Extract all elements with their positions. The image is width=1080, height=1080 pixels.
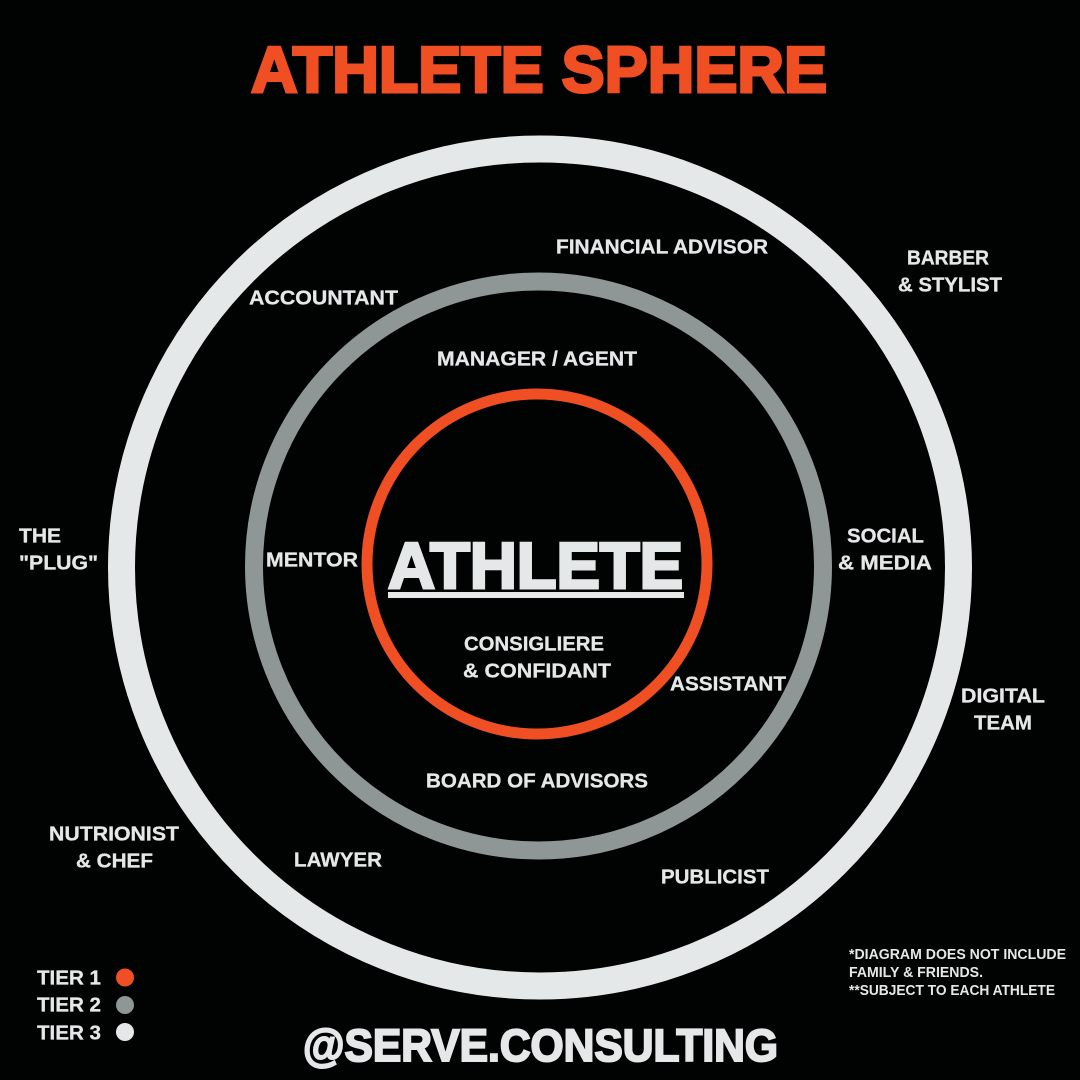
legend item: tier 1: TIER 1 [37, 967, 101, 989]
label: publicist: PUBLICIST [661, 866, 769, 888]
center label: athlete: ATHLETE [388, 529, 683, 602]
label: manager / agent: MANAGER / AGENT [437, 348, 637, 370]
legend item: tier 3: TIER 3 [37, 1022, 101, 1044]
label: barber and stylist [898, 247, 1002, 296]
label: digital team [961, 685, 1045, 734]
label: assistant: ASSISTANT [670, 673, 786, 695]
label: digital team: TEAM [974, 712, 1032, 734]
label: barber and stylist: BARBER [907, 247, 990, 269]
label: digital team: DIGITAL [961, 685, 1045, 707]
label: social and media: & MEDIA [838, 552, 932, 574]
label: social and media: SOCIAL [847, 525, 924, 547]
legend item: tier 2: TIER 2 [37, 994, 101, 1016]
label: consigliere and confidant [463, 633, 611, 682]
legend: tiers [37, 967, 134, 1044]
label: nutrionist and chef: & CHEF [76, 850, 153, 872]
label: financial advisor: FINANCIAL ADVISOR [556, 236, 769, 258]
footnote [849, 947, 1066, 999]
label: barber and stylist: & STYLIST [898, 274, 1002, 296]
label: consigliere and confidant: CONSIGLIERE [464, 633, 604, 655]
label: mentor: MENTOR [266, 549, 359, 571]
label: social and media [838, 525, 932, 574]
footnote: *DIAGRAM DOES NOT INCLUDE [849, 947, 1066, 963]
label: the plug: "PLUG" [19, 552, 98, 574]
ring: tier 2 [254, 282, 823, 850]
label: accountant: ACCOUNTANT [249, 287, 398, 309]
label: consigliere and confidant: & CONFIDANT [463, 660, 611, 682]
title: ATHLETE SPHERE [251, 33, 827, 106]
label: board of advisors: BOARD OF ADVISORS [426, 770, 648, 792]
label: nutrionist and chef [49, 823, 179, 872]
label: lawyer: LAWYER [294, 849, 383, 871]
label: the plug: THE [19, 525, 61, 547]
footnote: FAMILY & FRIENDS. [849, 965, 983, 981]
ring: tier 3 [122, 149, 958, 986]
footnote: **SUBJECT TO EACH ATHLETE [849, 983, 1055, 999]
label: the plug [19, 525, 98, 574]
footer handle: @SERVE.CONSULTING [303, 1020, 778, 1071]
label: nutrionist and chef: NUTRIONIST [49, 823, 179, 845]
ring: tier 1 [367, 394, 707, 734]
